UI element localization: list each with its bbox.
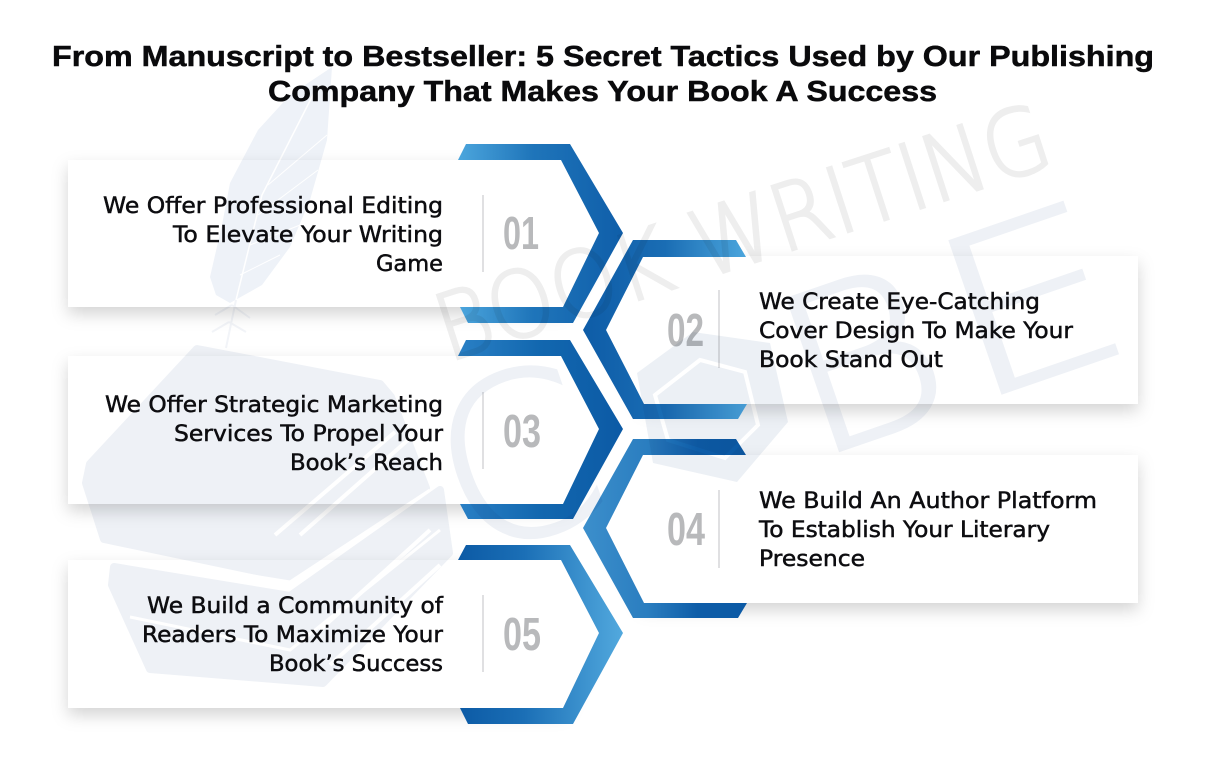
- watermark: E letter: E: [904, 153, 1158, 454]
- text 03: We Offer Strategic Marketing: [105, 392, 443, 418]
- text 02: We Create Eye-Catching: [759, 289, 1040, 315]
- watermark: B letter: B: [745, 215, 979, 509]
- title: [52, 41, 1154, 108]
- text 04: To Establish Your Literary: [758, 517, 1050, 543]
- text 03: Book’s Reach: [290, 450, 443, 476]
- number 01: 01: [503, 207, 539, 259]
- watermark: stack of books: [86, 349, 449, 683]
- text 01: Game: [376, 251, 443, 277]
- text 01: We Offer Professional Editing: [103, 193, 443, 219]
- chevron 02: [583, 240, 747, 419]
- watermark: feather: [210, 67, 332, 348]
- chevron 04: [583, 439, 747, 618]
- text 05: Book’s Success: [269, 651, 443, 677]
- text 04: We Build An Author Platform: [759, 488, 1097, 514]
- text 02: Book Stand Out: [759, 347, 943, 373]
- watermark: cube: [637, 332, 788, 482]
- chevron 03: [458, 340, 623, 519]
- text 04: [758, 488, 1097, 572]
- number 03: 03: [503, 405, 541, 457]
- text 03: Services To Propel Your: [174, 421, 444, 447]
- panel: tactic 05: [68, 545, 623, 724]
- chevron 01: [458, 144, 623, 323]
- panel: tactic 02: [583, 240, 1138, 419]
- text 02: [759, 289, 1074, 373]
- watermark: BOOK WRITING wordmark: BOOK WRITING: [422, 83, 1063, 383]
- number 02: 02: [667, 304, 704, 356]
- number 05: 05: [503, 608, 541, 660]
- text 05: We Build a Community of: [147, 593, 444, 619]
- panel: tactic 03: [68, 340, 623, 519]
- text 01: [103, 193, 443, 277]
- number 04: 04: [667, 503, 705, 555]
- panel: tactic 04: [583, 439, 1138, 618]
- text 05: [142, 593, 444, 677]
- text 01: To Elevate Your Writing: [172, 222, 443, 248]
- panel: tactic 01: [68, 144, 623, 323]
- title: Company That Makes Your Book A Success: [268, 76, 937, 108]
- watermark: logo: [86, 67, 1158, 683]
- text 03: [105, 392, 444, 476]
- title: From Manuscript to Bestseller: 5 Secret Tactics Used by Our Publishing: [52, 41, 1154, 73]
- watermark: C letter: C: [400, 312, 634, 611]
- text 02: Cover Design To Make Your: [759, 318, 1074, 344]
- text 04: Presence: [759, 546, 865, 572]
- chevron 05: [458, 545, 623, 724]
- text 05: Readers To Maximize Your: [142, 622, 444, 648]
